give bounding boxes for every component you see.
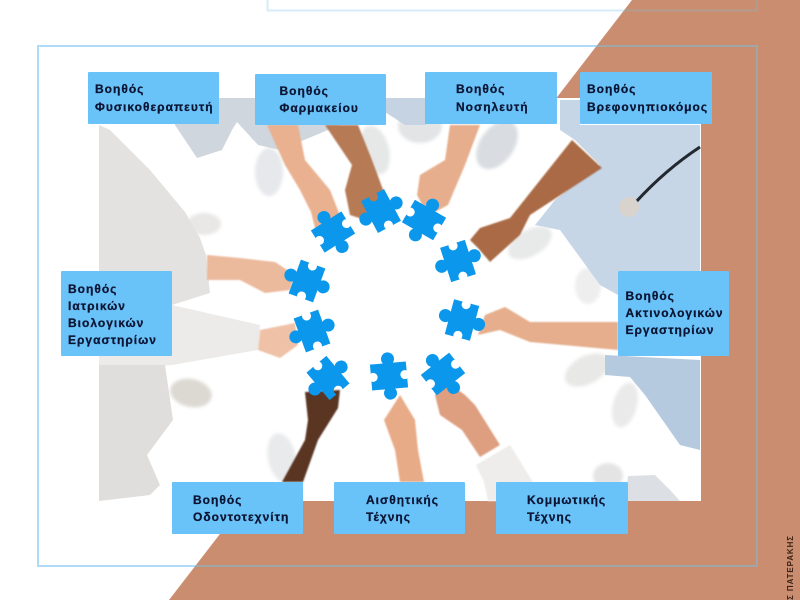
label: Αισθητικής Τέχνης: Τέχνης bbox=[366, 510, 411, 524]
label: Βοηθός Οδοντοτεχνίτη: Οδοντοτεχνίτη bbox=[193, 510, 289, 524]
label: Κομμωτικής Τέχνης: Τέχνης bbox=[527, 510, 572, 524]
label: Βοηθός Φαρμακείου: Βοηθός bbox=[280, 84, 329, 98]
right nurse scrubs bbox=[535, 100, 700, 295]
label: Βοηθός Ιατρικών Βιολογικών Εργαστηρίων: Ιατρικών bbox=[68, 299, 126, 313]
label: Βοηθός Βρεφονηπιοκόμος: Βοηθός bbox=[587, 82, 636, 96]
label: Βοηθός Φυσικοθεραπευτή: Φυσικοθεραπευτή bbox=[95, 100, 214, 114]
label: Βοηθός Ακτινολογικών Εργαστηρίων: Εργαστηρίων bbox=[626, 323, 714, 337]
arms and hands bbox=[207, 125, 618, 501]
label: Βοηθός Ιατρικών Βιολογικών Εργαστηρίων bbox=[61, 271, 172, 356]
far-left doctor white coat bbox=[99, 125, 210, 305]
stethoscope bbox=[619, 147, 700, 217]
label: Βοηθός Ιατρικών Βιολογικών Εργαστηρίων: Βοηθός bbox=[68, 282, 117, 296]
label: Βοηθός Βρεφονηπιοκόμος: Βρεφονηπιοκόμος bbox=[587, 100, 708, 114]
label: Βοηθός Ακτινολογικών Εργαστηρίων: Ακτινολογικών bbox=[626, 306, 724, 320]
photo background bbox=[99, 98, 701, 501]
label: Βοηθός Ιατρικών Βιολογικών Εργαστηρίων: Εργαστηρίων bbox=[68, 333, 157, 347]
vertical credit: Σ ΠΑΤΕΡΑΚΗΣ bbox=[786, 535, 795, 600]
label: Βοηθός Φαρμακείου bbox=[255, 74, 386, 125]
label: Αισθητικής Τέχνης bbox=[334, 482, 465, 534]
label: Κομμωτικής Τέχνης bbox=[496, 482, 628, 534]
label: Βοηθός Οδοντοτεχνίτη bbox=[172, 482, 303, 534]
label: Βοηθός Νοσηλευτή: Βοηθός bbox=[456, 82, 505, 96]
top frame fragment bbox=[268, 0, 757, 10]
puzzle pieces bbox=[279, 184, 490, 407]
label: Αισθητικής Τέχνης: Αισθητικής bbox=[366, 493, 439, 507]
label: Βοηθός Βρεφονηπιοκόμος bbox=[580, 72, 712, 124]
photo: medical team joining puzzle pieces bbox=[99, 98, 701, 501]
top trousers bbox=[172, 98, 340, 158]
label: Κομμωτικής Τέχνης: Κομμωτικής bbox=[527, 493, 606, 507]
label: Βοηθός Φυσικοθεραπευτή bbox=[88, 72, 219, 124]
label: Βοηθός Οδοντοτεχνίτη: Βοηθός bbox=[193, 493, 242, 507]
label: Βοηθός Φυσικοθεραπευτή: Βοηθός bbox=[95, 82, 144, 96]
shoes bbox=[168, 109, 643, 489]
label: Βοηθός Ακτινολογικών Εργαστηρίων bbox=[618, 271, 729, 356]
label: Βοηθός Ακτινολογικών Εργαστηρίων: Βοηθός bbox=[626, 289, 675, 303]
main frame bbox=[38, 46, 757, 566]
label: Βοηθός Ιατρικών Βιολογικών Εργαστηρίων: Βιολογικών bbox=[68, 316, 144, 330]
label: Βοηθός Νοσηλευτή: Νοσηλευτή bbox=[456, 100, 529, 114]
label: Βοηθός Νοσηλευτή bbox=[425, 72, 557, 124]
label: Βοηθός Φαρμακείου: Φαρμακείου bbox=[280, 101, 359, 115]
background: brown diagonal bbox=[169, 0, 800, 600]
